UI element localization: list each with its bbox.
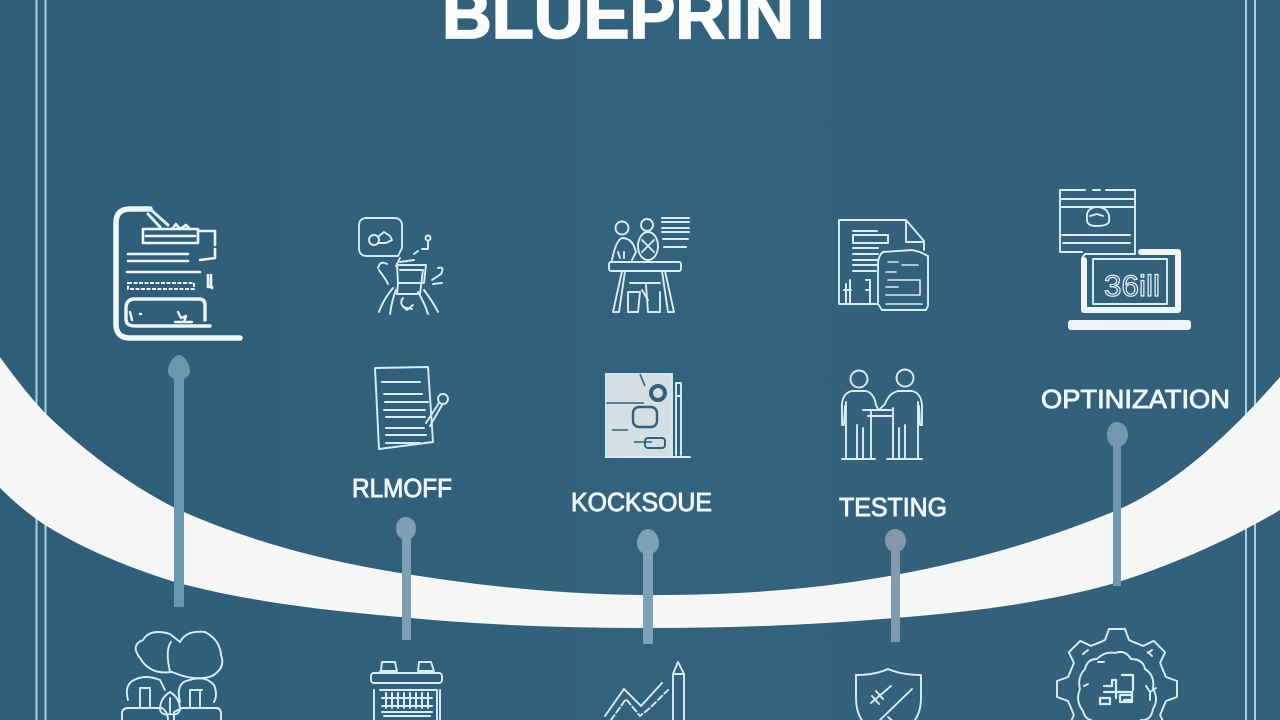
pin 4	[885, 529, 906, 642]
label: runoff: RLMOFF	[352, 473, 452, 503]
icon: written page with pen	[375, 367, 448, 449]
icon: window and laptop	[1060, 190, 1191, 330]
icon: large document	[116, 209, 240, 338]
curved white band	[0, 357, 1280, 628]
icon: window and laptop: 36ill	[1104, 270, 1160, 303]
icon: desk with people	[609, 218, 689, 312]
icon: chart with obelisk	[605, 662, 684, 720]
icon: two people handshake	[842, 370, 922, 459]
icon: keyboard device	[371, 662, 442, 720]
pin 5	[1107, 422, 1128, 586]
icon: gear	[1057, 629, 1177, 720]
label: optinization: OPTINIZATION	[1041, 384, 1230, 414]
icon: documents	[839, 220, 928, 310]
label: kocksoue: KOCKSOUE	[571, 487, 712, 517]
icon: tree clouds	[122, 632, 222, 720]
label: testing: TESTING	[839, 492, 947, 522]
icon: gear bubble and head	[359, 218, 442, 314]
pin 1	[168, 355, 190, 607]
pin 3	[637, 529, 659, 644]
icon: layout panel	[606, 374, 690, 457]
icon: shield	[856, 669, 921, 720]
pin 2	[396, 517, 416, 640]
